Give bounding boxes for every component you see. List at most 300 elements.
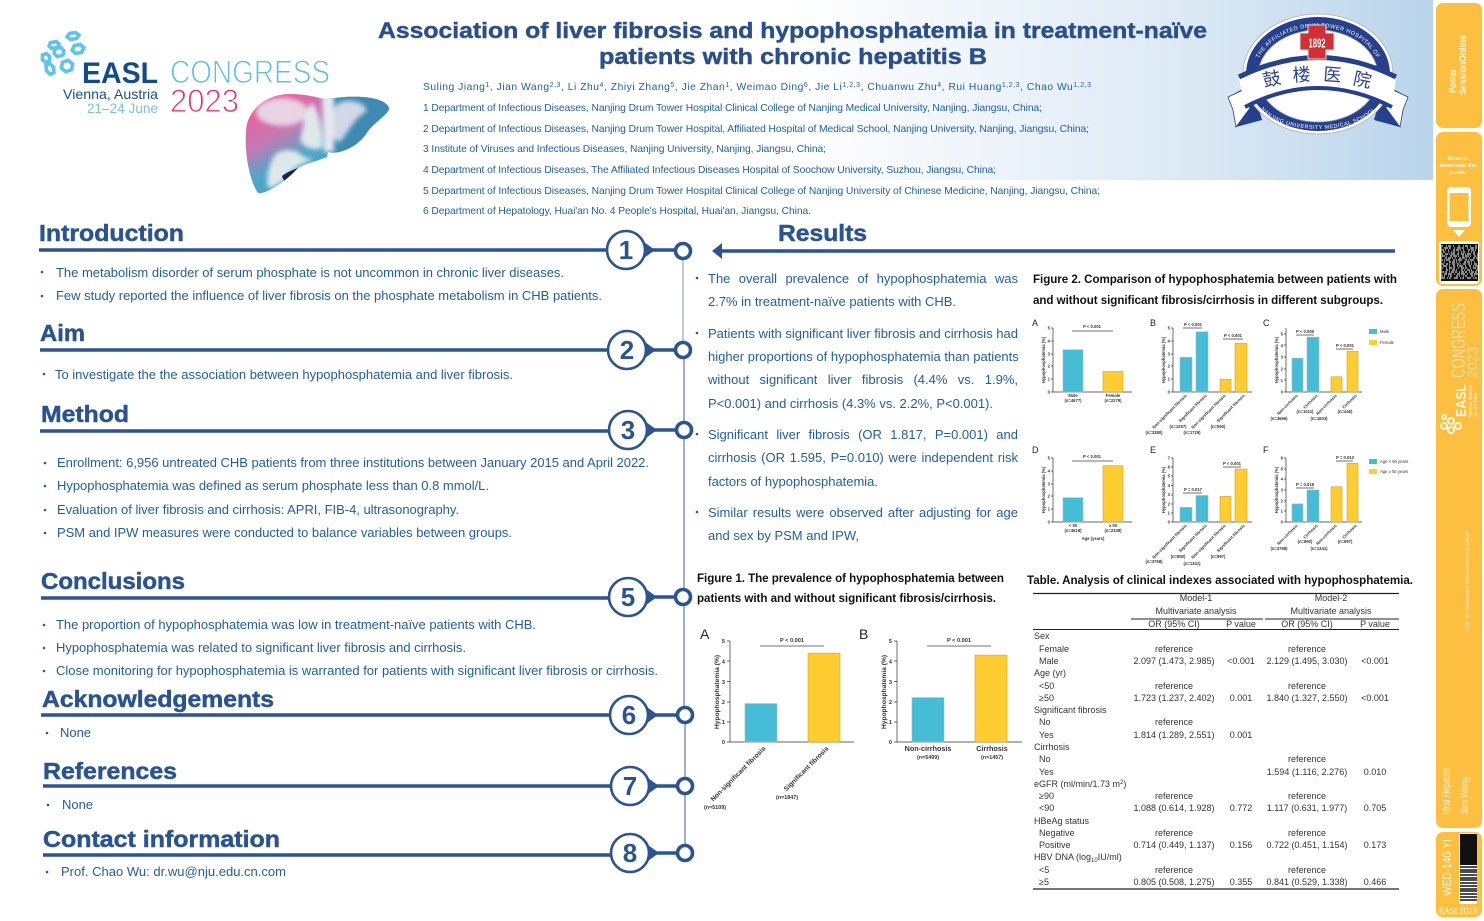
download prompt (1439, 156, 1477, 176)
model 1 values: 0.156 (1230, 840, 1252, 850)
sidebar: congress tab: EASL (1453, 384, 1470, 417)
chart: figure 1 panel B: B (859, 626, 868, 642)
chart: figure 2 panel C: Cirrhosis (1302, 393, 1319, 410)
chart: figure 2 panel B: (n=550) (1211, 424, 1226, 429)
marker 5: 5 (621, 582, 635, 612)
text block: The proportion of hypophosphatemia was low in treatment-naïve patients with CHB. (56, 617, 536, 632)
chart: figure 1 panel B: (n=5499) (917, 755, 939, 761)
text block (43, 617, 658, 678)
model 2 values: 1.594 (1.116, 2.276) (1267, 767, 1347, 777)
title: patients with chronic hepatitis B (599, 44, 987, 69)
text block (41, 265, 602, 303)
chart: figure 2 panel E: Non-significant fibrosis (1190, 523, 1227, 560)
chart: figure 2 panel D: 1 (1048, 506, 1051, 512)
panel: contact information (43, 826, 677, 879)
authors: , Zhiyi Zhang (604, 82, 670, 93)
sidebar: congress tab: Viral Hepatitis (1441, 767, 1453, 815)
chart: figure 2 panel C: 4 (1281, 343, 1284, 348)
chart: figure 2 panel A: Male (1068, 393, 1078, 398)
chart: figure 2 panel D: < 50 (1069, 523, 1078, 528)
model 2 values: reference (1288, 754, 1326, 764)
chart: figure 1 panel A: Significant fibrosis (783, 745, 831, 793)
sidebar: congress tab: Jian Wang (1459, 777, 1471, 815)
logo: Drum Tower Hospital seal: 1892 (1308, 36, 1326, 50)
heading: Contact information (43, 826, 280, 852)
bullet: significant fibrosis proportions (696, 326, 1018, 411)
download prompt: download the (1439, 163, 1477, 169)
logo: Drum Tower Hospital seal: 鼓 (1261, 67, 1283, 91)
row labels: Yes (1039, 730, 1054, 740)
chart: figure 2 panel B: Significant fibrosis (1178, 393, 1208, 423)
text block (44, 455, 649, 540)
chart: figure 2 panel C: P < 0.005 (1296, 329, 1315, 334)
marker 2: 2 (620, 335, 634, 365)
model 1 values: 0.355 (1230, 877, 1252, 887)
bullet: independent risk factors: Significant liver fibrosis (OR 1.817, P=0.001) and (708, 427, 1018, 442)
chart: figure 2 panel A: Hypophosphatemia (%) (1041, 336, 1046, 383)
title (378, 18, 1207, 69)
logo: EASL Congress 2023: Vienna, Austria (63, 86, 158, 102)
model 1 values: 1.088 (0.614, 1.928) (1133, 803, 1215, 813)
chart: figure 2 panel E: 1 (1168, 510, 1171, 516)
row labels: HBV DNA (log (1034, 852, 1091, 862)
row labels (1034, 631, 1126, 887)
row labels: ≥90 (1039, 791, 1054, 801)
row labels: 10 (1091, 858, 1098, 864)
chart: figure 2 panel D: 3 (1048, 482, 1051, 486)
authors: 5 (670, 82, 674, 89)
chart: figure 2 panel A: 4 (1048, 338, 1051, 344)
chart: figure 2 panel B: P < 0.001 (1184, 322, 1203, 327)
authors: 4 (937, 82, 941, 89)
bullet: PSM and IPW: Similar results were observed after adjusting for age (708, 505, 1018, 520)
bullet: independent risk factors (696, 427, 1018, 489)
chart: figure 2 panel F (1263, 445, 1362, 551)
chart: figure 2 panel A: 5 (1048, 326, 1051, 330)
model 2 values: 0.705 (1364, 803, 1386, 813)
chart: figure 2 panel C: Non-cirrhosis (1315, 393, 1338, 416)
row labels: ) (1123, 779, 1126, 789)
chart: figure 2 panel C: Cirrhosis (1341, 393, 1358, 410)
chart: figure 2 panel F: 2 (1281, 498, 1284, 504)
heading: Results (778, 220, 867, 246)
logo: EASL Congress 2023: 21–24 June (87, 100, 158, 116)
panel: method (40, 401, 676, 540)
chart: figure 2 panel A (1032, 318, 1132, 403)
marker 3: 3 (621, 415, 635, 445)
chart: figure 2 panel E: 3 (1168, 492, 1171, 497)
legend: age: Age ≥ 50 years (1380, 469, 1408, 474)
chart: figure 2 panel A: 2 (1048, 364, 1051, 368)
chart: figure 1 panel B: P < 0.001 (947, 638, 971, 644)
chart: figure 2 panel D: (n=4618) (1064, 528, 1082, 533)
text block: The metabolism disorder of serum phosphate is not uncommon in chronic liver diseases. (56, 265, 564, 280)
model 2 values: reference (1288, 791, 1326, 801)
authors: , Rui Huang (942, 82, 1002, 93)
chart: figure 2 panel A: (n=4677) (1064, 398, 1082, 403)
bullet: overall prevalence: The overall prevalence of hypophosphatemia was (708, 271, 1018, 286)
logo: Drum Tower Hospital seal: NANJING UNIVERSITY MEDICAL SCHOOL (1262, 107, 1373, 129)
logo: EASL Congress 2023: CONGRESS (170, 54, 330, 90)
panel: introduction (39, 220, 675, 303)
table header: Model-1 (1180, 593, 1212, 603)
chart: figure 2 panel E: 4 (1168, 483, 1171, 488)
logo: Drum Tower Hospital seal (1228, 14, 1408, 134)
model 2 values: <0.001 (1361, 693, 1389, 703)
model 2 values: 0.841 (0.529, 1.338) (1266, 877, 1348, 887)
text block (47, 797, 93, 812)
authors: 1,2,3 (1073, 82, 1091, 89)
table: clinical indexes (1033, 593, 1399, 889)
chart: figure 2 panel E: 2 (1168, 502, 1171, 506)
chart: figure 2 panel E: E (1150, 445, 1156, 455)
figure 1 caption: patients with and without significant fibrosis/cirrhosis. (697, 592, 996, 605)
chart: figure 2 panel F: Non-cirrhosis (1315, 523, 1338, 546)
marker 7 (43, 767, 677, 805)
chart: figure 2 panel F: Hypophosphatemia (%) (1274, 466, 1279, 513)
chart: figure 2 panel B: 4 (1168, 338, 1171, 344)
heading: Introduction (39, 220, 184, 246)
table header: OR (95% CI) (1148, 619, 1200, 629)
text block: Close monitoring for hypophosphatemia is warranted for patients with significant liver fibrosis or cirrhosis. (56, 663, 658, 678)
authors: 4 (600, 82, 604, 89)
row labels: 2 (1120, 780, 1124, 786)
chart: figure 2 panel B: 1 (1168, 376, 1171, 382)
chart: figure 2 panel F: P = 0.018 (1296, 482, 1315, 487)
marker 5 (41, 578, 675, 616)
chart: figure 2 panel F: 5 (1281, 466, 1284, 472)
row labels: Cirrhosis (1034, 742, 1070, 752)
row labels: <50 (1039, 681, 1054, 691)
model 1 values: reference (1155, 681, 1193, 691)
chart: figure 2 panel A: 1 (1048, 376, 1051, 382)
model 2 values: 2.129 (1.495, 3.030) (1266, 656, 1348, 666)
marker 7: 7 (623, 771, 637, 801)
heading: Conclusions (41, 568, 185, 594)
authors: 1 (725, 82, 729, 89)
chart: figure 2 panel E: 5 (1168, 474, 1171, 478)
row labels: Significant fibrosis (1034, 705, 1107, 715)
authors: 2,3 (550, 82, 561, 89)
affiliations: 1 Department of Infectious Diseases, Nanjing Drum Tower Hospital Clinical College of Nanjing Medical University, Nanjing, Jiangsu, China; (423, 103, 1042, 114)
row labels: Negative (1039, 828, 1075, 838)
model 1 values: 0.714 (0.449, 1.137) (1133, 840, 1215, 850)
chart: figure 1 panel A: 0 (722, 740, 725, 746)
bullet: independent risk factors: factors of hypophosphatemia. (708, 474, 878, 489)
table header: Model-2 (1315, 593, 1347, 603)
bullet: independent risk factors: cirrhosis (OR 1.595, P=0.010) were independent risk (708, 450, 1018, 465)
chart: figure 2 panel E: Significant fibrosis (1178, 523, 1208, 553)
legend: sex (1369, 329, 1395, 345)
chart: figure 2 panel E (1145, 445, 1252, 566)
row labels: Age (yr) (1034, 668, 1066, 678)
authors: , Chuanwu Zhu (861, 82, 937, 93)
table header: Multivariate analysis (1155, 606, 1237, 616)
chart: figure 2 panel D: P < 0.001 (1083, 454, 1102, 459)
heading: Acknowledgements (42, 686, 274, 712)
text block: To investigate the the association between hypophosphatemia and liver fibrosis. (55, 367, 513, 382)
chart: figure 1 panel A: P < 0.001 (780, 638, 804, 644)
chart: figure 2 panel C: Hypophosphatemia (%) (1274, 336, 1279, 383)
chart: figure 2 panel D: 5 (1048, 456, 1051, 460)
row labels: Male (1039, 656, 1059, 666)
row labels: ≥50 (1039, 693, 1054, 703)
legend: sex: Male (1380, 329, 1390, 334)
table header (1148, 593, 1390, 629)
row labels: eGFR (ml/min/1.73 m (1034, 779, 1120, 789)
model 2 values: 0.010 (1364, 767, 1386, 777)
title: Association of liver fibrosis and hypophosphatemia in treatment-naïve (378, 18, 1207, 43)
heading: Aim (40, 320, 85, 346)
sidebar: congress tab: 21–24 June (1473, 393, 1479, 417)
chart: figure 2 panel D: 0 (1048, 520, 1051, 524)
authors: , Chao Wu (1020, 82, 1073, 93)
chart: figure 2 panel A: 0 (1048, 390, 1051, 394)
heading: Method (41, 401, 129, 427)
chart: figure 2 panel F: F (1263, 445, 1269, 455)
chart: figure 2 panel B: Non-significant fibrosis (1190, 393, 1227, 430)
chart: figure 1 panel A: 3 (722, 680, 725, 686)
chart: figure 2 panel B: (n=1297) (1169, 424, 1187, 429)
row labels: HBeAg status (1034, 816, 1090, 826)
model 1 values: reference (1155, 865, 1193, 875)
rule with arrow (712, 243, 1395, 259)
chart: figure 2 panel B (1145, 318, 1252, 435)
chart: figure 1 panel A: (n=1847) (776, 795, 798, 801)
model 2 values: reference (1288, 865, 1326, 875)
affiliations: 3 Institute of Viruses and Infectious Diseases, Nanjing University, Nanjing, Jiangsu, China; (423, 144, 826, 155)
authors: 1 (485, 82, 489, 89)
model 2 values: 1.840 (1.327, 2.550) (1266, 693, 1348, 703)
heading: References (43, 758, 177, 784)
text block: Hypophosphatemia was defined as serum phosphate less than 0.8 mmol/L. (57, 478, 489, 493)
model 2 values: reference (1288, 644, 1326, 654)
marker 2 (40, 331, 675, 369)
sidebar: congress tab: Vienna, Austria (1468, 384, 1474, 417)
bullet: significant fibrosis proportions: higher proportions of hypophosphatemia than patients (708, 349, 1018, 364)
chart: figure 2 panel C: (n=3666) (1270, 416, 1288, 421)
chart: figure 2 panel C: P < 0.001 (1336, 343, 1355, 348)
marker 6: 6 (622, 700, 636, 730)
chart: figure 2 panel D: 4 (1048, 468, 1051, 474)
table header: P value (1360, 619, 1390, 629)
chart: figure 2 panel C: (n=1011) (1297, 409, 1314, 414)
download prompt: poster (1449, 170, 1468, 176)
chart: figure 2 panel F: 4 (1281, 476, 1284, 482)
sidebar: session code tab: WED-140-YI (1440, 839, 1454, 896)
table header: Multivariate analysis (1290, 606, 1372, 616)
sidebar: congress tab (1436, 289, 1482, 828)
authors: , Li Zhu (561, 82, 599, 93)
logo: Drum Tower Hospital seal: 院 (1351, 68, 1373, 92)
chart: figure 2 panel B: 5 (1168, 326, 1171, 330)
chart: figure 2 panel E: 6 (1168, 464, 1171, 470)
chart: figure 2 panel D: D (1032, 445, 1039, 455)
bullet: PSM and IPW (696, 505, 1018, 543)
chart: figure 2 panel F: 6 (1281, 456, 1284, 460)
text block: Evaluation of liver fibrosis and cirrhosis: APRI, FIB-4, ultrasonography. (57, 502, 459, 517)
chart: figure 2 panel B: Significant fibrosis (1216, 393, 1246, 423)
chart: figure 1 panel B: 3 (889, 680, 892, 686)
model 2 values: 0.466 (1364, 877, 1386, 887)
barcode (1459, 833, 1477, 904)
chart: figure 2 panel F: 1 (1281, 508, 1284, 514)
chart: figure 1 panel A: 2 (722, 700, 725, 706)
chart: figure 2 panel C: 3 (1281, 354, 1284, 360)
marker 3 (40, 411, 676, 449)
chart: figure 2 panel F: Non-cirrhosis (1276, 523, 1299, 546)
chart: figure 2 panel D (1032, 445, 1132, 541)
row labels: IU/ml) (1098, 852, 1122, 862)
row labels: Yes (1039, 767, 1054, 777)
bullet: overall prevalence (696, 271, 1018, 309)
figure 2 caption: Figure 2. Comparison of hypophosphatemia between patients with (1033, 273, 1397, 286)
affiliations (423, 103, 1100, 217)
chart: figure 2 panel B: 2 (1168, 364, 1171, 368)
chart: figure 2 panel C: C (1263, 318, 1270, 328)
sidebar: PosterSessionOnline tab: SessionOnline (1458, 35, 1469, 95)
bullet: significant fibrosis proportions: without significant liver fibrosis (4.4% vs. 1.9%, (708, 372, 1018, 387)
model 1 values: reference (1155, 717, 1193, 727)
marker 1: 1 (619, 235, 633, 265)
marker 6 (41, 696, 677, 734)
authors: , Jian Wang (490, 82, 549, 93)
authors: , Weimao Ding (730, 82, 804, 93)
row labels: ≥5 (1039, 877, 1049, 887)
chart: figure 2 panel B: P < 0.001 (1224, 333, 1243, 338)
chart: figure 2 panel B: 3 (1168, 352, 1171, 356)
bullet: PSM and IPW: and sex by PSM and IPW, (708, 528, 859, 543)
affiliations: 2 Department of Infectious Diseases, Nanjing Drum Tower Hospital, Affiliated Hospital of Medical School, Nanjing University, Nanjing, Jiangsu, China; (423, 124, 1089, 135)
table header: OR (95% CI) (1281, 619, 1333, 629)
panel: acknowledgements (41, 686, 677, 740)
chart: figure 1 panel A: 1 (722, 720, 725, 726)
logo: EASL Congress 2023: EASL (82, 57, 158, 90)
figure 2 caption (1033, 273, 1397, 307)
chart: figure 2 panel D: Hypophosphatemia (%) (1041, 466, 1046, 513)
panel: results (696, 220, 1395, 543)
chart: figure 2 panel C (1263, 318, 1362, 421)
table title: Table. Analysis of clinical indexes associated with hypophosphatemia. (1027, 574, 1413, 587)
chart: figure 2 panel E: P = 0.017 (1184, 487, 1203, 492)
chart: figure 1 panel B: (n=1457) (981, 755, 1003, 761)
chart: figure 2 panel E: 0 (1168, 520, 1171, 524)
text block: Few study reported the influence of liver fibrosis on the phosphate metabolism in CHB patients. (56, 288, 602, 303)
chart: figure 2 panel B: Hypophosphatemia (%) (1161, 336, 1166, 383)
chart: figure 2 panel F: (n=997) (1338, 539, 1353, 544)
model 1 values: reference (1155, 791, 1193, 801)
chart: figure 2 panel E: (n=850) (1171, 554, 1186, 559)
model 1 values: 1.723 (1.237, 2.402) (1133, 693, 1215, 703)
panel: references (43, 758, 677, 812)
figure 1 caption (697, 572, 1004, 605)
chart: figure 2 panel A: 3 (1048, 352, 1051, 356)
chart: figure 1 panel B: Cirrhosis (976, 744, 1008, 753)
model 1 values: 0.772 (1230, 803, 1252, 813)
chart: figure 2 panel E: (n=1341) (1183, 561, 1201, 566)
model 2 values: 0.173 (1364, 840, 1386, 850)
model 2 values: reference (1288, 681, 1326, 691)
figure 2 caption: and without significant fibrosis/cirrhosis in different subgroups. (1033, 294, 1383, 307)
chart: figure 2 panel D: (n=2338) (1104, 528, 1122, 533)
chart: figure 2 panel D: ≥ 50 (1109, 523, 1118, 528)
model 1 values: reference (1155, 828, 1193, 838)
table header: P value (1226, 619, 1256, 629)
sidebar: congress tab: 2023 (1464, 347, 1480, 378)
row labels: Sex (1034, 631, 1050, 641)
model 1 values: 0.001 (1230, 730, 1252, 740)
chart: figure 2 panel E: 7 (1168, 456, 1171, 460)
row labels: No (1039, 717, 1051, 727)
legend: age (1369, 459, 1408, 474)
chart: figure 2 panel F: 0 (1281, 520, 1284, 524)
chart: figure 1 panel B: 0 (889, 740, 892, 746)
chart: figure 1 panel B: 1 (889, 720, 892, 726)
chart: figure 2 panel B: (n=3380) (1145, 430, 1163, 435)
chart: figure 2 panel E: P < 0.001 (1223, 461, 1242, 466)
chart: figure 2 panel C: (n=1833) (1310, 416, 1328, 421)
model 1 values: 1.814 (1.289, 2.551) (1133, 730, 1215, 740)
header background band (0, 0, 1433, 180)
row labels: <90 (1039, 803, 1054, 813)
chart: figure 2 panel F: P = 0.013 (1336, 455, 1355, 460)
model 2 values (1266, 644, 1389, 887)
chart: figure 2 panel A: P < 0.001 (1083, 324, 1102, 329)
sidebar: congress tab: CONGRESS (1449, 303, 1470, 378)
chart: figure 2 panel F: (n=850) (1298, 539, 1313, 544)
chart: figure 2 panel F: Cirrhosis (1341, 523, 1358, 540)
sidebar: scan to download (1436, 132, 1482, 286)
QR code (1439, 241, 1479, 284)
chart: figure 2 panel D: Age (years) (1082, 536, 1105, 541)
logo: Drum Tower Hospital seal: 医 (1323, 64, 1342, 86)
chart: figure 2 panel F: 3 (1281, 488, 1284, 492)
panel: conclusions (41, 568, 675, 678)
chart: figure 1 panel B: 4 (889, 660, 893, 666)
authors: Suling Jiang (423, 82, 485, 93)
logo: Drum Tower Hospital seal: 楼 (1292, 64, 1311, 86)
marker 8: 8 (623, 838, 637, 868)
illustration: liver (246, 94, 390, 194)
row labels: No (1039, 754, 1051, 764)
affiliations: 6 Department of Hepatology, Huai'an No. 4 People's Hospital, Huai'an, Jiangsu, China. (423, 206, 811, 217)
chart: figure 2 panel E: (n=3768) (1145, 559, 1163, 564)
icon: hexagon cluster (1441, 415, 1461, 433)
chart: figure 2 panel A: A (1032, 318, 1038, 328)
chart: figure 2 panel E: (n=997) (1211, 554, 1226, 559)
marker 8 (43, 834, 677, 872)
chart: figure 1 panel A: Hypophosphatemia (%) (714, 655, 721, 729)
chart: figure 2 panel B: 0 (1168, 390, 1171, 394)
chart: figure 2 panel C: Non-cirrhosis (1276, 393, 1299, 416)
chart: figure 2 panel E: Non-significant fibrosis (1151, 523, 1188, 560)
bullet: overall prevalence: 2.7% in treatment-naïve patients with CHB. (708, 294, 956, 309)
chart: figure 2 panel E: Significant fibrosis (1216, 523, 1246, 553)
chart: figure 1 panel A (700, 626, 854, 811)
chart: figure 2 panel A: (n=2279) (1104, 398, 1122, 403)
logo: EASL Congress 2023 (41, 32, 330, 119)
model 1 values: reference (1155, 644, 1193, 654)
chart: figure 2 panel F: (n=1341) (1310, 546, 1328, 551)
model 2 values: 1.117 (0.631, 1.977) (1267, 803, 1347, 813)
bullet: significant fibrosis proportions: P<0.001) and cirrhosis (4.3% vs. 2.2%, P<0.001). (708, 396, 993, 411)
text block: Prof. Chao Wu: dr.wu@nju.edu.cn.com (61, 864, 286, 879)
legend: age: Age < 50 years (1380, 459, 1408, 464)
text block: Hypophosphatemia was related to significant liver fibrosis and cirrhosis. (56, 640, 466, 655)
chart: figure 1 panel B: 5 (889, 639, 892, 645)
panel: aim (40, 320, 675, 382)
model 1 values (1133, 644, 1255, 887)
